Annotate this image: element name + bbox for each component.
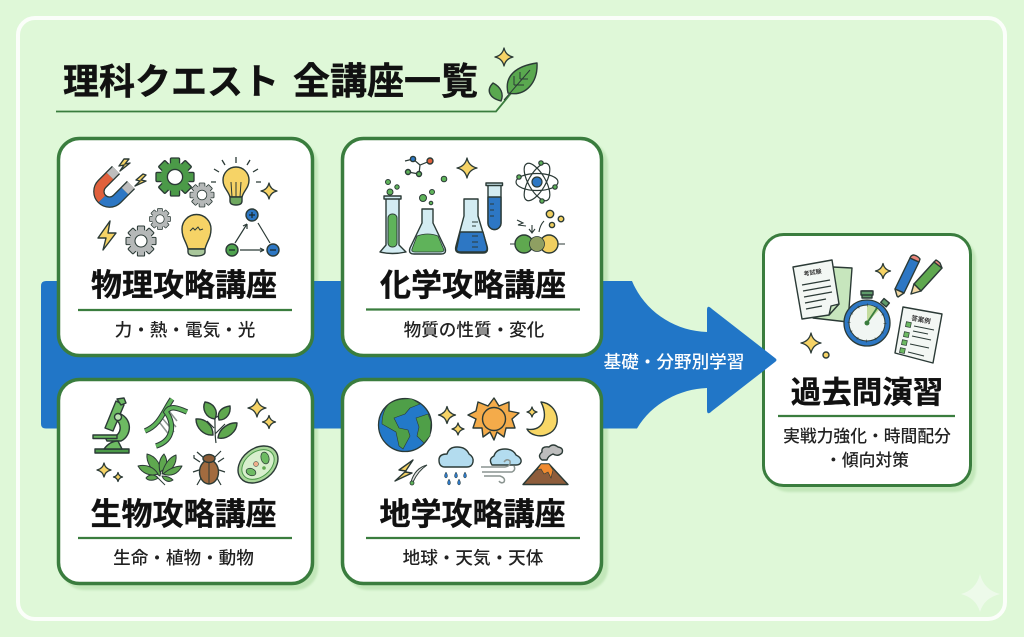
icon: exam paper: 考試験 xyxy=(803,267,822,278)
icon: wind xyxy=(481,449,521,483)
heading: 化学攻略講座 xyxy=(380,268,566,303)
icon: leaves xyxy=(138,454,182,485)
title: 全講座一覧 xyxy=(293,61,478,102)
arrow label: 基礎・分野別学習 xyxy=(604,352,744,372)
panel: physics xyxy=(58,138,312,356)
icon: meteor xyxy=(410,465,427,485)
divider xyxy=(778,415,955,417)
icon: DNA xyxy=(145,399,187,446)
icon: reaction xyxy=(510,210,565,253)
heading: 地学攻略講座 xyxy=(380,497,566,532)
icon: test tube xyxy=(380,196,406,254)
icon: bubbles xyxy=(386,176,447,205)
icon: sparkle xyxy=(457,158,477,178)
icon: answer sheet xyxy=(895,307,942,363)
title: 理科クエスト xyxy=(63,61,279,102)
icon: seedling xyxy=(196,402,237,443)
divider xyxy=(78,537,292,539)
icon: exam paper xyxy=(793,260,852,322)
icon: beetle xyxy=(193,451,225,485)
icon: volcano xyxy=(523,445,568,484)
icon: answer sheet: 答案例 xyxy=(911,313,932,326)
icon: earth xyxy=(378,398,432,452)
icon: blue flask xyxy=(456,199,488,253)
divider xyxy=(78,309,292,311)
panel: biology xyxy=(58,380,312,584)
icon: corner sparkle xyxy=(961,574,1000,612)
icon: magnet xyxy=(99,159,146,202)
panel: past exam practice xyxy=(764,234,970,486)
icon: sun xyxy=(468,398,519,440)
icon: light bulb with rays xyxy=(211,157,261,205)
icon: lightning xyxy=(395,460,413,481)
panel: chemistry xyxy=(342,138,602,356)
subtitle: 力・熱・電気・光 xyxy=(115,320,255,340)
icon: green flask xyxy=(410,209,446,254)
subtitle: 生命・植物・動物 xyxy=(113,548,254,568)
icon: sparkles xyxy=(97,399,276,482)
heading: 物理攻略講座 xyxy=(91,268,277,303)
divider xyxy=(366,308,580,311)
icon: sparkles xyxy=(438,406,537,435)
panel: earth science xyxy=(342,380,602,584)
icon: moon xyxy=(527,402,557,436)
icon: sparkles and dot xyxy=(801,264,890,358)
subtitle: 物質の性質・変化 xyxy=(404,320,545,340)
arrow: flow to past exam practice xyxy=(41,281,776,428)
icon: atom xyxy=(516,160,558,204)
subtitle: 実戦力強化・時間配分 xyxy=(783,427,951,446)
icon: sparkle xyxy=(261,183,277,199)
icon: rain cloud xyxy=(439,447,473,485)
icon: blue test tube xyxy=(486,183,502,230)
icon: lightning xyxy=(98,221,116,250)
subtitle second line: ・傾向対策 xyxy=(825,451,909,470)
icon: pencils xyxy=(895,255,942,297)
divider xyxy=(366,537,580,539)
icon: microscope xyxy=(93,398,129,453)
title underline xyxy=(56,92,512,112)
heading: 生物攻略講座 xyxy=(90,497,276,532)
icon: light bulb xyxy=(182,214,211,256)
card shadows xyxy=(62,142,976,590)
icon: charge triangle xyxy=(226,209,279,256)
icon: stopwatch xyxy=(844,291,890,346)
heading: 過去問演習 xyxy=(791,376,943,410)
title xyxy=(63,61,478,102)
icon: leaf and sparkle xyxy=(489,48,537,101)
icon: molecule xyxy=(405,156,433,176)
icon: gears xyxy=(126,158,214,256)
icon: cell xyxy=(231,438,285,491)
subtitle: 地球・天気・天体 xyxy=(403,548,544,568)
